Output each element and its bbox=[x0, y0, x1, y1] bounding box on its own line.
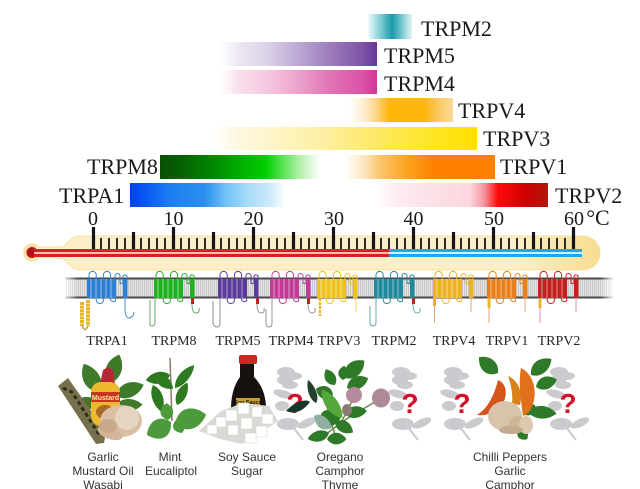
heat bar: TRPV1 bbox=[345, 154, 567, 179]
channel: TRPV1 bbox=[487, 271, 528, 323]
heat bar: TRPV2 bbox=[375, 183, 622, 208]
agonist captions: Eucaliptol bbox=[145, 464, 197, 478]
icon: unknown agonist TRPV4: ? bbox=[453, 388, 471, 419]
image: chilli peppers, garlic, camphor bbox=[474, 352, 559, 443]
cell membrane bbox=[62, 276, 615, 300]
channel: TRPM8 bbox=[150, 271, 199, 326]
channel: TRPV2 bbox=[538, 271, 578, 323]
channel name labels: TRPM8 bbox=[151, 334, 197, 349]
cold bar: TRPM8: TRPM8 bbox=[87, 154, 158, 179]
agonist captions: Garlic bbox=[87, 450, 119, 464]
heat bar: TRPV3 bbox=[212, 126, 550, 151]
icon: unknown agonist TRPM4 bbox=[272, 367, 318, 440]
agonist captions: Camphor bbox=[315, 464, 365, 478]
image: soy sauce and sugar: Soy Sauce bbox=[234, 400, 262, 406]
channel: TRPM2 bbox=[370, 271, 420, 326]
temperature scale numbers: 60 bbox=[564, 208, 584, 230]
heat bar: TRPV2: TRPV2 bbox=[555, 183, 622, 208]
scale ticks bbox=[101, 238, 565, 249]
agonist captions bbox=[72, 450, 547, 489]
channel name labels: TRPM2 bbox=[371, 334, 417, 349]
image: garlic, mustard oil, wasabi: Mustard bbox=[92, 395, 119, 402]
icon: unknown agonist TRPV2 bbox=[545, 367, 591, 440]
temperature scale numbers bbox=[88, 205, 610, 230]
temperature scale numbers: 20 bbox=[244, 208, 264, 230]
icon: unknown agonist TRPV4 bbox=[439, 367, 485, 440]
agonist captions: Sugar bbox=[231, 464, 263, 478]
agonist captions: Garlic bbox=[494, 464, 526, 478]
temperature scale numbers: 30 bbox=[324, 208, 344, 230]
thermometer bbox=[23, 236, 600, 270]
channel: TRPM4 bbox=[266, 271, 315, 327]
channel name labels: TRPV4 bbox=[433, 334, 475, 349]
heat bar: TRPV4: TRPV4 bbox=[458, 98, 525, 123]
heat bar: TRPV1: TRPV1 bbox=[500, 154, 567, 179]
agonist captions: Mint bbox=[159, 450, 182, 464]
cold bar: TRPM8 bbox=[87, 154, 320, 179]
channel name labels: TRPA1 bbox=[86, 334, 128, 349]
agonist captions: Chilli Peppers bbox=[473, 450, 547, 464]
agonist captions: Mustard Oil bbox=[72, 464, 134, 478]
temperature scale numbers: °C bbox=[586, 205, 610, 230]
icon: unknown agonist TRPM2: ? bbox=[401, 388, 419, 419]
heat bar: TRPM4: TRPM4 bbox=[384, 71, 455, 96]
channel: TRPV3 bbox=[317, 271, 358, 316]
channel name labels: TRPV2 bbox=[538, 334, 580, 349]
icon: unknown agonist TRPM2 bbox=[387, 367, 433, 440]
heat bar: TRPV4 bbox=[350, 98, 525, 123]
temperature scale numbers: 40 bbox=[404, 208, 424, 230]
image: mint, eucalyptus bbox=[143, 358, 209, 444]
channel name labels: TRPV1 bbox=[486, 334, 528, 349]
channel name labels: TRPM4 bbox=[268, 334, 314, 349]
channel name labels bbox=[86, 334, 580, 349]
channel: TRPV4 bbox=[433, 271, 474, 323]
heat bar: TRPM2: TRPM2 bbox=[421, 16, 492, 41]
agonist captions: Soy Sauce bbox=[218, 450, 276, 464]
heat bar: TRPM2 bbox=[368, 14, 492, 41]
heat bar: TRPM5: TRPM5 bbox=[384, 43, 455, 68]
heat bar: TRPM4 bbox=[220, 70, 455, 96]
temperature scale numbers: 10 bbox=[164, 208, 184, 230]
icon: unknown agonist TRPM4: ? bbox=[286, 388, 304, 419]
image: oregano, camphor, thyme bbox=[286, 355, 390, 444]
major ticks bbox=[94, 227, 574, 249]
agonist captions: Oregano bbox=[317, 450, 364, 464]
heat bar: TRPV3: TRPV3 bbox=[483, 126, 550, 151]
cold bar: TRPA1 bbox=[59, 183, 285, 208]
icon: unknown agonist TRPV2: ? bbox=[559, 388, 577, 419]
temperature scale numbers: 50 bbox=[484, 208, 504, 230]
temperature scale numbers: 0 bbox=[88, 208, 98, 230]
cold bar: TRPA1: TRPA1 bbox=[59, 183, 124, 208]
heat bar: TRPM5 bbox=[220, 42, 455, 68]
image: garlic, mustard oil, wasabi bbox=[58, 352, 146, 444]
channel: TRPM5 bbox=[213, 271, 264, 327]
channel name labels: TRPV3 bbox=[318, 334, 360, 349]
image: soy sauce and sugar bbox=[199, 355, 278, 444]
channel: TRPA1 bbox=[82, 271, 134, 330]
channel name labels: TRPM5 bbox=[215, 334, 261, 349]
